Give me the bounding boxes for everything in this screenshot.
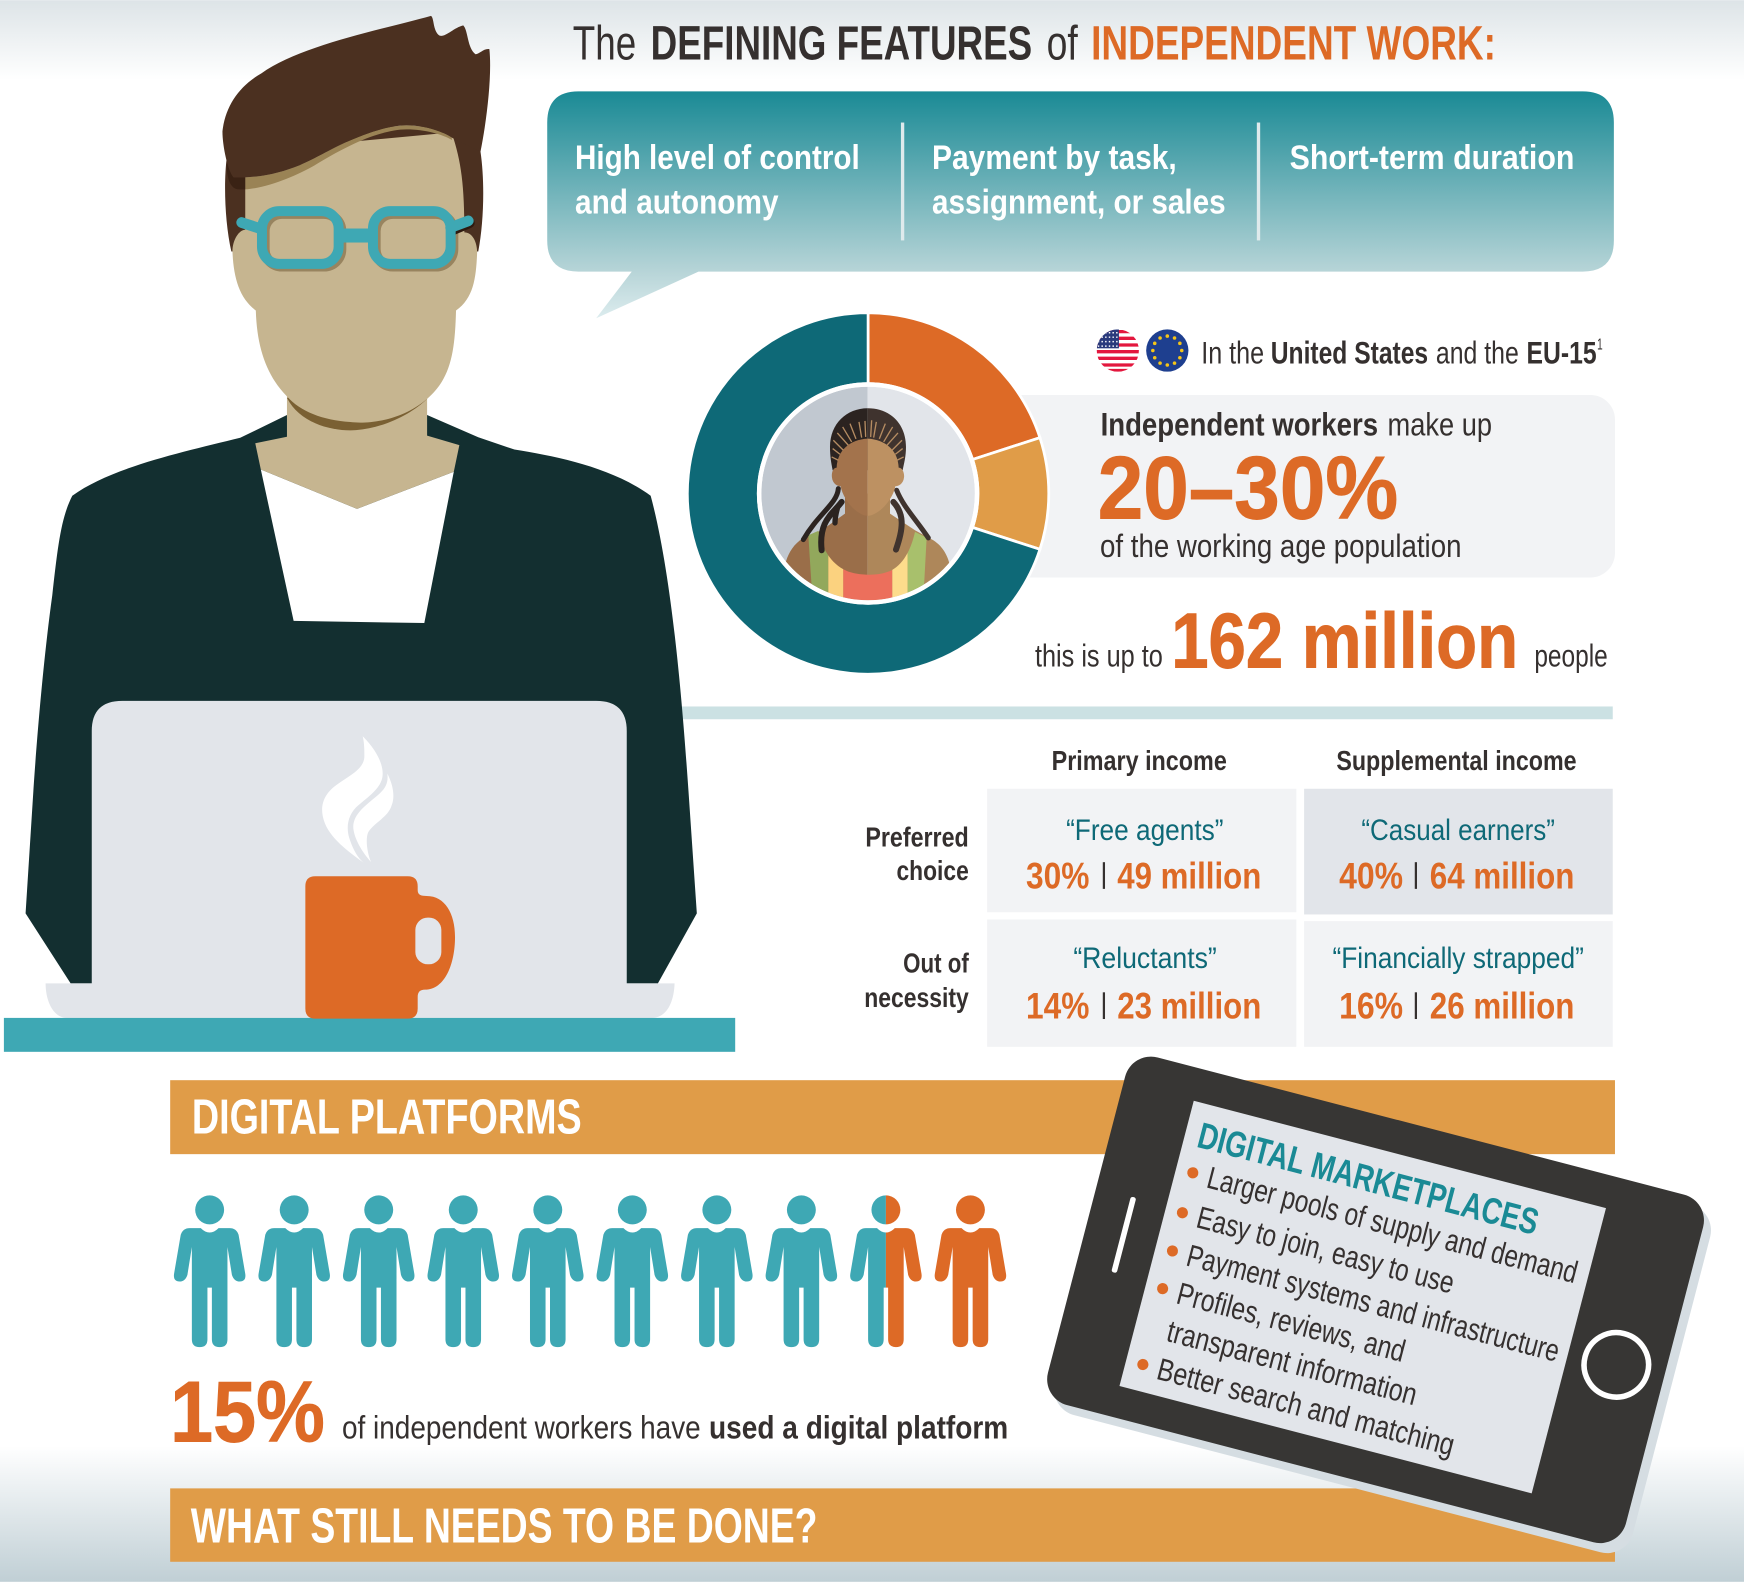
feature: short-term: Short-term duration xyxy=(1290,139,1574,177)
marketplaces list: Profiles, reviews, and xyxy=(1173,1276,1409,1369)
shoulders and chest xyxy=(786,498,868,600)
face xyxy=(832,439,868,516)
cell: free agents: 30% xyxy=(1026,855,1089,896)
icon: EU flag xyxy=(1146,329,1188,372)
cell: free agents: 49 million xyxy=(1117,855,1261,896)
face xyxy=(232,132,477,423)
hair shadow xyxy=(245,125,452,189)
back hair xyxy=(225,126,483,251)
man illustration xyxy=(4,16,735,1052)
cell: casual earners xyxy=(1304,789,1613,914)
braid partings xyxy=(832,420,904,460)
title: DEFINING FEATURES xyxy=(651,18,1032,71)
icon: woman portrait xyxy=(762,386,975,600)
title xyxy=(573,18,1496,71)
statistic: 15 percent xyxy=(170,1364,1008,1461)
smartphone: digital marketplaces xyxy=(1041,1051,1717,1559)
heading: what still needs to be done: WHAT STILL NEEDS TO BE DONE? xyxy=(191,1499,818,1553)
cell: free agents xyxy=(987,789,1296,912)
heading: digital platforms: DIGITAL PLATFORMS xyxy=(192,1091,582,1145)
cell: financially strapped: 16% xyxy=(1339,985,1403,1026)
region text: EU-15 xyxy=(1527,335,1597,370)
row labels: Preferred xyxy=(865,822,969,853)
marketplaces list: Easy to join, easy to use xyxy=(1193,1200,1458,1300)
panel text xyxy=(1098,407,1492,564)
hair crown xyxy=(830,408,868,470)
braids xyxy=(803,489,928,550)
icon: US flag xyxy=(1097,329,1139,372)
column headings xyxy=(1052,745,1577,776)
region text: In the xyxy=(1201,335,1264,370)
panel text: make up xyxy=(1388,407,1492,443)
marketplaces list: Better search and matching xyxy=(1154,1352,1458,1463)
jacket xyxy=(26,415,697,983)
glasses xyxy=(242,211,469,267)
panel text: 20–30% xyxy=(1098,437,1398,537)
feature: control and autonomy: High level of control xyxy=(575,139,860,177)
donut chart xyxy=(687,313,1049,674)
coffee mug xyxy=(305,876,455,1019)
cell: casual earners: 64 million xyxy=(1430,855,1574,896)
background gradient bottom xyxy=(0,1446,1744,1582)
statistic: 15 percent: of independent workers have xyxy=(342,1409,701,1445)
striped tank top xyxy=(808,531,926,600)
cell: free agents: “Free agents” xyxy=(1066,814,1223,847)
title: The xyxy=(573,18,636,71)
heading: what still needs to be done xyxy=(170,1488,1615,1562)
title: INDEPENDENT WORK: xyxy=(1091,18,1496,71)
feature: payment xyxy=(932,139,1226,222)
cell: financially strapped: 26 million xyxy=(1430,985,1574,1026)
pictogram: ten people xyxy=(174,1195,1006,1347)
region text xyxy=(1201,335,1603,370)
desk xyxy=(4,1018,735,1052)
panel: share of working age population xyxy=(979,395,1615,577)
row labels: necessity xyxy=(864,982,969,1013)
162 million statement: people xyxy=(1534,638,1608,673)
column headings: Supplemental income xyxy=(1336,745,1577,776)
region text: United States xyxy=(1271,335,1428,370)
cell: reluctants xyxy=(987,919,1296,1047)
panel text: Independent workers xyxy=(1101,407,1378,443)
region statement with flags xyxy=(1097,329,1603,372)
feature: payment: Payment by task, xyxy=(932,139,1177,177)
laptop xyxy=(46,701,675,1018)
marketplaces heading: DIGITAL MARKETPLACES xyxy=(1194,1115,1543,1243)
row labels xyxy=(864,822,969,1013)
marketplaces list: Payment systems and infrastructure xyxy=(1183,1238,1563,1369)
chin shadow xyxy=(287,394,427,430)
row labels: choice xyxy=(896,855,969,886)
cell: casual earners: “Casual earners” xyxy=(1361,814,1555,847)
marketplaces list: transparent information xyxy=(1163,1314,1421,1412)
feature: control and autonomy: and autonomy xyxy=(575,184,779,222)
feature: control and autonomy xyxy=(575,139,860,222)
cell: reluctants: 23 million xyxy=(1117,985,1261,1026)
statistic: 15 percent: 15% xyxy=(170,1364,325,1461)
marketplaces list: Larger pools of supply and demand xyxy=(1203,1160,1581,1290)
divider bar xyxy=(667,706,1613,719)
cell: reluctants: 14% xyxy=(1026,985,1089,1026)
row labels: Out of xyxy=(903,947,969,978)
cell: reluctants: “Reluctants” xyxy=(1073,942,1217,975)
statistic: 15 percent: used a digital platform xyxy=(709,1409,1008,1445)
cell: financially strapped xyxy=(1304,921,1613,1047)
feature: payment: assignment, or sales xyxy=(932,184,1226,222)
income table xyxy=(864,745,1613,1047)
panel text: of the working age population xyxy=(1100,528,1461,564)
speech bubble: defining features xyxy=(547,91,1614,318)
column headings: Primary income xyxy=(1052,745,1227,776)
background gradient top xyxy=(0,0,1744,80)
162 million statement: 162 million xyxy=(1171,599,1518,685)
neck xyxy=(255,378,459,509)
title: of xyxy=(1047,18,1078,71)
region text: 1 xyxy=(1597,336,1603,353)
region text: and the xyxy=(1436,335,1519,370)
marketplaces list xyxy=(1133,1155,1584,1482)
white shirt xyxy=(261,470,454,623)
steam xyxy=(322,736,393,863)
cell: casual earners: 40% xyxy=(1339,855,1403,896)
cell: financially strapped: “Financially strapped” xyxy=(1332,942,1584,975)
162 million statement: this is up to xyxy=(1035,638,1163,673)
heading: digital platforms xyxy=(170,1080,1615,1154)
hair xyxy=(222,16,490,177)
